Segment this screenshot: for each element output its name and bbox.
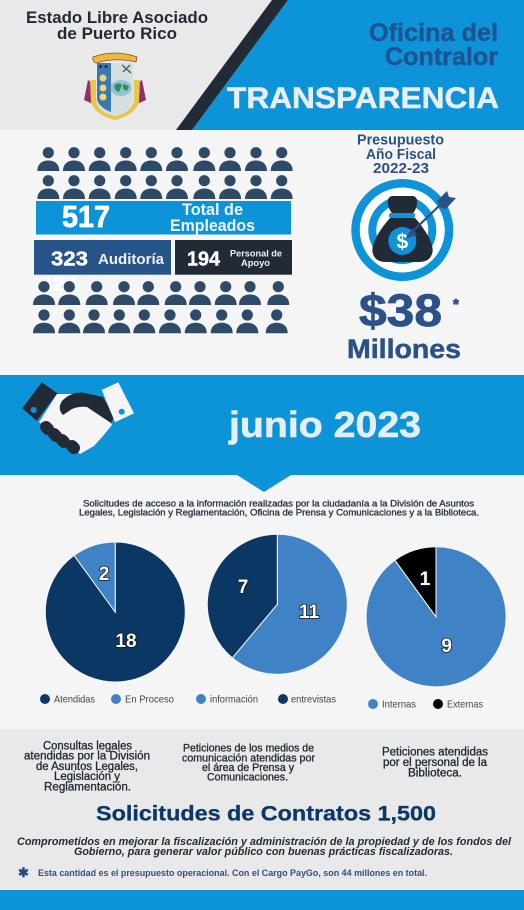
- text block: compromiso: Comprometidos en mejorar la fiscalización y administración de la propiedad y de los fondos del: [17, 836, 512, 848]
- heading: Estado Libre Asociado: de Puerto Rico: [57, 25, 177, 43]
- footer bar: [0, 890, 524, 910]
- date heading: junio 2023: [228, 404, 421, 445]
- heading: Oficina del Contralor: [369, 19, 498, 71]
- text block: peticiones de medios: el área de Prensa y: [202, 762, 294, 774]
- panel: total de empleados: Empleados: [170, 217, 255, 235]
- icon: money bag target with arrow: [351, 179, 456, 281]
- legend: pie one: En Proceso: [125, 694, 174, 706]
- panel: personal de apoyo: Personal de: [230, 249, 282, 259]
- heading: Oficina del Contralor: Oficina del: [369, 19, 498, 47]
- legend: pie two: [196, 694, 336, 706]
- text block: compromiso: [17, 836, 512, 858]
- pie chart: internas externas: [366, 547, 506, 687]
- text block: peticiones biblioteca: [382, 747, 488, 780]
- legend: pie three: Internas: [382, 698, 416, 710]
- icon group: people rows above total: [37, 147, 293, 199]
- panel: auditoria: 323: [51, 248, 88, 270]
- stat: 38 millones: *: [453, 296, 459, 313]
- footnote: [18, 865, 427, 880]
- legend: pie two: información: [210, 694, 258, 706]
- pie chart: informacion entrevistas: 7: [238, 577, 248, 598]
- text block: consultas legales: [24, 741, 150, 794]
- text block: peticiones biblioteca: Biblioteca.: [408, 768, 462, 780]
- title: TRANSPARENCIA: TRANSPARENCIA: [227, 82, 499, 115]
- stat: 38 millones: $38: [359, 285, 442, 336]
- panel: personal de apoyo: Apoyo: [241, 258, 271, 268]
- legend: pie one: Atendidas: [54, 694, 95, 706]
- heading: Oficina del Contralor: Contralor: [385, 43, 498, 71]
- panel: bottom summary: [0, 729, 524, 890]
- text block: consultas legales: Reglamentación.: [44, 782, 131, 794]
- text block: peticiones biblioteca: Peticiones atendidas: [382, 747, 488, 759]
- pie chart: internas externas: 9: [441, 636, 452, 657]
- text block: pie chart intro: Solicitudes de acceso a la información realizadas por la ciudadanía a la División de Asuntos: [83, 499, 475, 509]
- legend: pie three: Externas: [447, 698, 483, 710]
- pie chart: atendidas en proceso: 2: [99, 564, 109, 585]
- text block: consultas legales: atendidas por la División: [24, 751, 150, 763]
- panel: total de empleados: Total de: [182, 201, 243, 219]
- text block: compromiso: Gobierno, para generar valor público con buenas prácticas fiscalizadoras.: [74, 846, 453, 858]
- text block: consultas legales: Legislación y: [54, 771, 120, 783]
- heading: Estado Libre Asociado: [26, 9, 208, 43]
- icon group: people rows below total: [33, 281, 289, 333]
- header banner: [0, 0, 524, 130]
- text block: peticiones de medios: comunicación atendidas por: [182, 752, 315, 764]
- panel: personal de apoyo: 194: [187, 248, 221, 270]
- text block: consultas legales: Consultas legales: [43, 741, 132, 753]
- icon: crest: [84, 53, 146, 120]
- panel: total de empleados: [36, 199, 291, 235]
- pie chart: atendidas en proceso: 18: [115, 631, 137, 652]
- panel: personal de apoyo: [175, 240, 292, 275]
- panel: total de empleados: 517: [62, 199, 110, 234]
- legend: pie two: entrevistas: [291, 694, 336, 706]
- text block: peticiones de medios: Peticiones de los medios de: [183, 743, 314, 755]
- legend: pie one: [40, 694, 174, 706]
- icon: handshake: [22, 382, 134, 454]
- heading: presupuesto ano fiscal: Presupuesto: [357, 133, 444, 149]
- pie chart: informacion entrevistas: [207, 534, 347, 674]
- heading: presupuesto ano fiscal: Año Fiscal: [366, 147, 436, 163]
- banner: junio 2023: [0, 375, 524, 492]
- text block: peticiones biblioteca: por el personal de la: [383, 757, 488, 769]
- legend: pie three: [368, 698, 483, 710]
- heading: solicitudes de contratos: Solicitudes de Contratos 1,500: [96, 802, 436, 826]
- panel: auditoria: [34, 240, 171, 275]
- stat: 38 millones: [347, 285, 461, 364]
- pie chart: atendidas en proceso: [45, 542, 185, 682]
- text block: pie chart intro: [79, 499, 479, 518]
- icon: money bag target with arrow: $: [396, 230, 408, 254]
- footnote: Esta cantidad es el presupuesto operacional. Con el Cargo PayGo, son 44 millones en total.: [38, 868, 427, 878]
- heading: Estado Libre Asociado: Estado Libre Asociado: [26, 9, 208, 27]
- text block: consultas legales: de Asuntos Legales,: [36, 761, 138, 773]
- heading: presupuesto ano fiscal: 2022-23: [373, 161, 429, 177]
- text block: pie chart intro: Legales, Legislación y Reglamentación, Oficina de Prensa y Comunicaciones y a la Biblioteca.: [79, 508, 479, 518]
- pie chart: informacion entrevistas: 11: [299, 602, 319, 623]
- footnote: ✱: [18, 865, 29, 880]
- heading: presupuesto ano fiscal: [357, 133, 444, 177]
- panel: auditoria: Auditoría: [98, 252, 165, 268]
- text block: peticiones de medios: [182, 743, 315, 784]
- text block: peticiones de medios: Comunicaciones.: [207, 772, 288, 784]
- stat: 38 millones: Millones: [347, 334, 461, 364]
- pie chart: internas externas: 1: [420, 569, 431, 590]
- faint ghost number: 323: [40, 274, 77, 296]
